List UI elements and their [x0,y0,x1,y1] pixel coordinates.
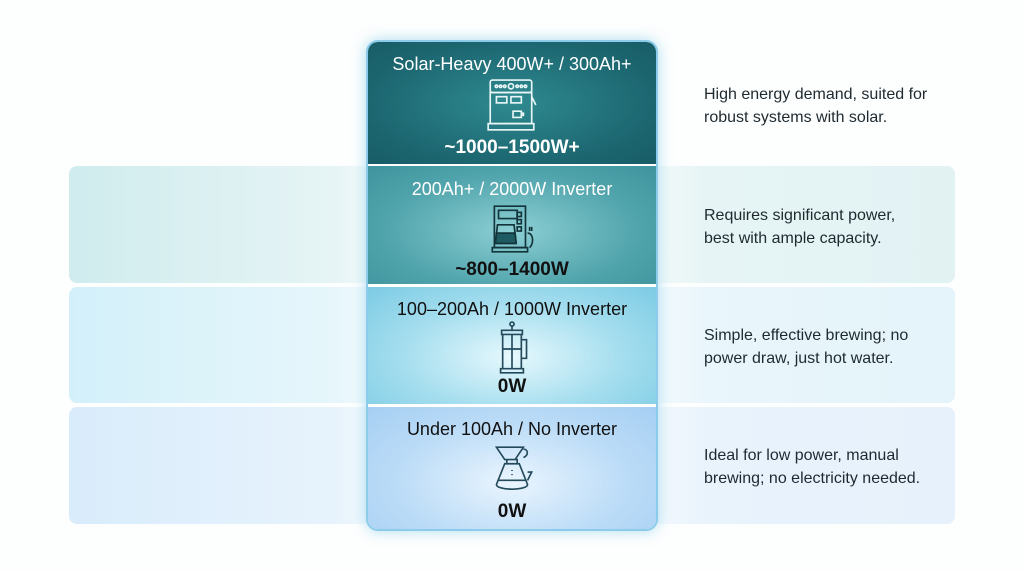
tier 2: drip coffee: ~800–1400W [455,259,569,280]
description 3: Simple, effective brewing; no [704,327,908,344]
tier 3: french press: 0W [498,376,526,397]
description 4: brewing; no electricity needed. [704,470,920,487]
tier 1: solar-heavy: Solar-Heavy 400W+ / 300Ah+ [392,54,632,74]
tier 2: drip coffee: 200Ah+ / 2000W Inverter [412,179,612,199]
tier 1: solar-heavy [368,42,656,164]
description 3: power draw, just hot water. [704,350,893,367]
band: row 2 [69,166,955,283]
icon: french press [500,321,528,374]
description 1: robust systems with solar. [704,109,887,126]
central tier column [366,40,658,531]
band: row 4 [69,407,955,524]
description 2 [704,207,895,247]
dividers [368,164,656,166]
description 2: best with ample capacity. [704,230,882,247]
icon: pour-over carafe [495,446,533,490]
description 2: Requires significant power, [704,207,895,224]
tier 2: drip coffee [368,166,656,284]
description 4 [704,447,920,487]
tier 4: pour over [368,407,656,533]
icon: espresso machine [487,79,536,131]
band: row 3 [69,287,955,403]
description 1 [704,86,927,126]
tier 3: french press [368,287,656,404]
description 4: Ideal for low power, manual [704,447,899,464]
tier 4: pour over: Under 100Ah / No Inverter [407,419,617,439]
icon: drip coffee maker [491,205,534,253]
description 1: High energy demand, suited for [704,86,927,103]
description 3 [704,327,908,367]
tier 1: solar-heavy: ~1000–1500W+ [444,137,580,158]
tier 4: pour over: 0W [498,501,526,522]
tier 3: french press: 100–200Ah / 1000W Inverter [397,299,627,319]
